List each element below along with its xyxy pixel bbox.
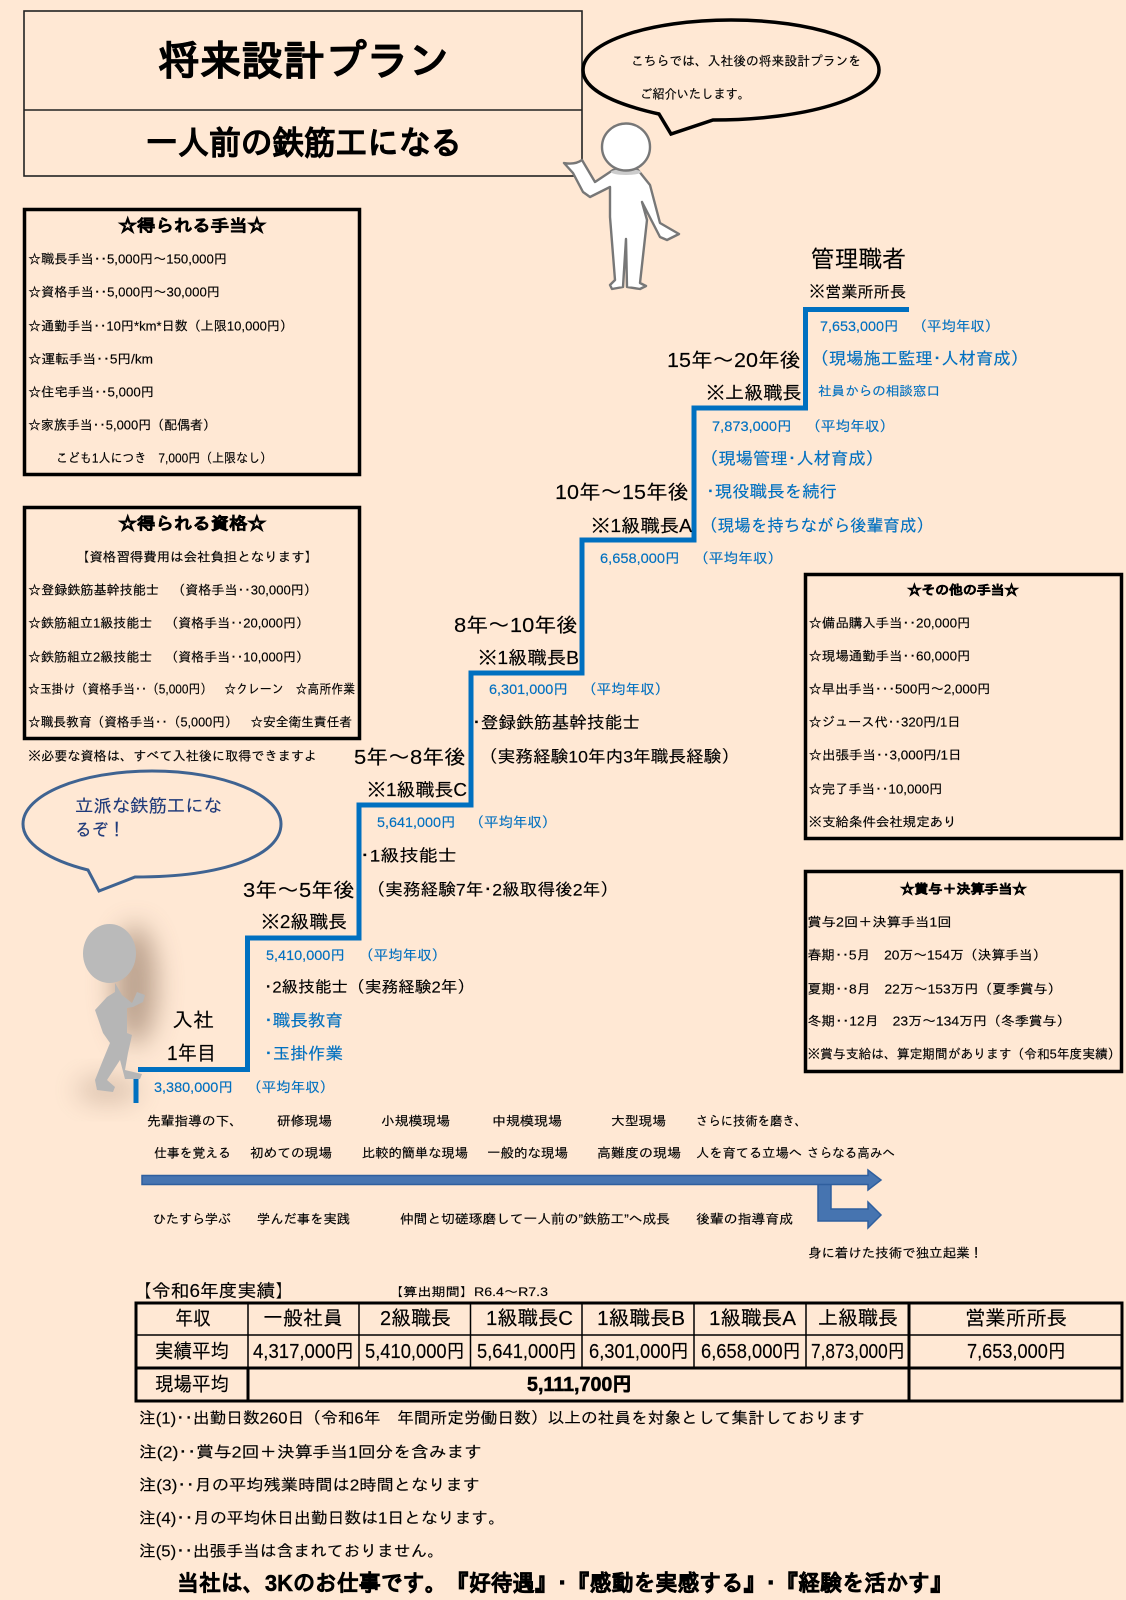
icon: white presenter figure [564,124,679,289]
foreman B salary: 6,301,000円 （平均年収） [489,681,669,697]
manager details: （現場施工監理･人材育成） [812,350,1028,368]
icon: gray climbing figure [76,924,157,1102]
footnotes: 注(4)･･月の平均休日出勤日数は1日となります。 [139,1510,505,1528]
table header row [175,1308,1067,1330]
allowance list: こども1人につき 7,000円（上限なし） [56,450,272,466]
senior foreman details: 7,873,000円 （平均年収） [712,418,894,434]
other allowance list: ☆出張手当･･3,000円/1日 [808,748,962,762]
bonus list: 夏期･･8月 22万～153万円（夏季賞与） [808,982,1062,996]
timeline labels below arrow [153,1212,983,1260]
timeline labels above arrow: 比較的簡単な現場 [362,1146,468,1160]
senior foreman details: ･現役職長を続行 [706,482,837,502]
step: grade 1 foreman A: ※1級職長A [591,516,692,536]
panel: bonus [806,872,1122,1072]
step: grade 1 foreman B: ･登録鉄筋基幹技能士 [472,714,640,732]
step: grade 1 foreman B [454,615,739,766]
step: senior foreman: 15年～20年後 [667,350,801,372]
panel: other allowances [806,574,1122,838]
other allowance list: ※支給条件会社規定あり [808,814,956,830]
grade 2 training [264,1012,343,1064]
closing message: 当社は、3Kのお仕事です。『好待遇』･『感動を実感する』･『経験を活かす』 [177,1570,952,1596]
footnotes: 注(1)･･出勤日数260日（令和6年 年間所定労働日数）以上の社員を対象として集計しております [139,1408,865,1428]
qualification list: ☆鉄筋組立2級技能士 （資格手当･･10,000円） [28,650,309,664]
speech bubble: introduction: こちらでは、入社後の将来設計プランを [631,54,861,68]
step: grade 1 foreman B: 8年～10年後 [454,615,578,637]
qualification list: ☆玉掛け（資格手当･･（5,000円） ☆クレーン ☆高所作業 [28,682,355,696]
allowance list: ☆職長手当･･5,000円～150,000円 [28,252,227,266]
other allowance list: ☆早出手当･･･500円～2,000円 [808,682,990,696]
manager details: 7,653,000円 （平均年収） [820,318,999,334]
table actual average row: 5,641,000円 [477,1341,577,1363]
timeline labels above arrow: 人を育てる立場へ [696,1146,802,1160]
step: grade 2 foreman: 3年～5年後 [243,880,355,902]
step: senior foreman [667,350,933,536]
heading: allowances: ☆得られる手当☆ [117,216,267,236]
timeline labels above arrow: 小規模現場 [381,1114,450,1128]
joining salary: 3,380,000円 （平均年収） [154,1079,334,1095]
timeline labels above arrow: 大型現場 [611,1114,666,1128]
table header row: 営業所所長 [965,1308,1067,1330]
speech bubble: introduction: ご紹介いたします。 [640,86,750,102]
timeline labels above arrow [147,1114,895,1160]
bonus list: ※賞与支給は、算定期間があります（令和5年度実績） [808,1046,1120,1062]
heading: other allowances: ☆その他の手当☆ [906,582,1020,598]
speech bubble: introduction [583,20,879,134]
table heading: 【令和6年度実績】 [133,1281,294,1301]
footnotes: 注(5)･･出張手当は含まれておりません。 [139,1542,444,1560]
step: grade 1 foreman B: （実務経験10年内3年職長経験） [480,748,739,766]
table header row: 上級職長 [818,1308,898,1330]
grade 2 salary: 5,410,000円 （平均年収） [266,947,446,963]
step: manager: ※営業所所長 [809,284,906,302]
other allowance list: ☆ジュース代･･320円/1日 [808,714,960,730]
step: joining: 1年目 [167,1043,216,1065]
manager details: 社員からの相談窓口 [818,384,940,398]
heading: qualifications: ☆得られる資格☆ [117,514,267,534]
timeline labels below arrow: 身に着けた技術で独立起業！ [808,1246,983,1260]
bonus list: 冬期･･12月 23万～134万円（冬季賞与） [808,1014,1070,1028]
qualification list: ☆職長教育（資格手当･･（5,000円） ☆安全衛生責任者 [28,714,352,730]
step: manager [809,246,1028,398]
table actual average row: 6,658,000円 [701,1341,801,1363]
table: annual income [136,1302,1122,1401]
step: senior foreman: ※上級職長 [706,383,802,403]
arrow: career timeline with branch [142,1170,881,1228]
allowance list: ☆家族手当･･5,000円（配偶者） [28,418,216,432]
speech bubble: motivation: るぞ！ [75,820,125,840]
table heading [133,1281,548,1301]
timeline labels above arrow: 高難度の現場 [597,1146,681,1160]
table header row: 1級職長C [486,1308,573,1330]
table header row: 1級職長A [709,1308,797,1330]
grade 2 training: ･職長教育 [264,1012,343,1030]
other allowance list: ☆備品購入手当･･20,000円 [808,616,970,630]
step: grade 2 foreman: ※2級職長 [261,912,347,932]
step: grade 1 foreman C: 5年～8年後 [354,747,466,769]
foreman A salary: 6,658,000円 （平均年収） [600,550,782,566]
timeline labels above arrow: 研修現場 [277,1114,332,1128]
timeline labels below arrow: 後輩の指導育成 [696,1212,793,1226]
panel: qualifications [24,508,360,738]
foreman C salary: 5,641,000円 （平均年収） [377,814,556,830]
allowance list: ☆通勤手当･･10円*km*日数（上限10,000円） [28,318,293,334]
timeline labels above arrow: 中規模現場 [492,1114,562,1128]
table site average row: 現場平均 [155,1374,229,1396]
grade 2 training: ･玉掛作業 [264,1044,343,1064]
step: grade 1 foreman C [354,747,618,900]
step: grade 2 foreman [243,880,474,1064]
table header row: 1級職長B [597,1308,685,1330]
step: grade 1 foreman A [555,482,782,566]
table actual average row: 7,873,000円 [811,1341,905,1363]
footnotes: 注(2)･･賞与2回＋決算手当1回分を含みます [139,1444,482,1462]
manager details [812,318,1028,398]
table header row: 2級職長 [380,1308,451,1330]
step: grade 1 foreman C: （実務経験7年･2級取得後2年） [368,880,618,900]
timeline labels above arrow: 一般的な現場 [487,1146,568,1160]
step: joining: 入社 [172,1010,214,1032]
heading: bonus: ☆賞与＋決算手当☆ [899,882,1028,896]
table site average row [155,1374,632,1396]
panel: allowances [24,210,360,474]
timeline labels below arrow: ひたすら学ぶ [153,1212,231,1226]
main title: 将来設計プラン [158,38,450,84]
step: joining [154,1010,334,1095]
timeline labels above arrow: さらなる高みへ [807,1146,895,1160]
table actual average row: 6,301,000円 [589,1341,689,1363]
table header row: 年収 [175,1308,211,1330]
step: grade 1 foreman B: ※1級職長B [478,648,579,668]
timeline labels below arrow: 学んだ事を実践 [257,1212,350,1226]
footnotes [139,1408,865,1560]
step: grade 1 foreman C: ･1級技能士 [360,846,457,866]
other allowance list: ☆完了手当･･10,000円 [808,782,942,796]
other allowance list [808,616,990,830]
table actual average row [155,1341,1066,1363]
qualification list [28,550,355,730]
table header row: 一般社員 [263,1308,343,1330]
table actual average row: 4,317,000円 [253,1341,354,1363]
bonus list [808,914,1120,1062]
career staircase line [136,310,909,1103]
qualification list: ☆鉄筋組立1級技能士 （資格手当･･20,000円） [28,616,309,630]
step: grade 1 foreman A: 10年～15年後 [555,482,689,504]
note: qualifications: ※必要な資格は、すべて入社後に取得できますよ [28,748,317,764]
table actual average row: 5,410,000円 [365,1341,465,1363]
bonus list: 春期･･5月 20万～154万（決算手当） [808,948,1046,962]
timeline labels above arrow: 先輩指導の下、 [147,1114,243,1128]
step: grade 1 foreman C: ※1級職長C [367,780,467,800]
speech bubble: motivation [23,771,281,891]
allowance list: ☆住宅手当･･5,000円 [28,384,154,400]
senior foreman details [701,418,933,536]
table heading: 【算出期間】R6.4～R7.3 [389,1285,548,1299]
table actual average row: 7,653,000円 [967,1341,1066,1363]
timeline labels above arrow: 仕事を覚える [154,1146,231,1160]
table site average row: 5,111,700円 [527,1374,632,1396]
speech bubble: motivation: 立派な鉄筋工にな [75,796,222,816]
senior foreman details: （現場管理･人材育成） [701,450,883,468]
qualification list: ☆登録鉄筋基幹技能士 （資格手当･･30,000円） [28,582,317,598]
table actual average row: 実績平均 [155,1341,229,1363]
senior foreman details: （現場を持ちながら後輩育成） [701,516,933,536]
qualification list: 【資格習得費用は会社負担となります】 [76,550,318,564]
step: manager: 管理職者 [811,246,906,274]
bonus list: 賞与2回＋決算手当1回 [808,914,952,930]
allowance list: ☆資格手当･･5,000円～30,000円 [28,284,220,300]
step: grade 2 foreman: ･2級技能士（実務経験2年） [264,978,474,996]
timeline labels below arrow: 仲間と切磋琢磨して一人前の”鉄筋工”へ成長 [400,1212,670,1226]
allowance list: ☆運転手当･･5円/km [28,352,153,366]
allowance list [28,252,293,466]
title block [24,11,582,176]
other allowance list: ☆現場通勤手当･･60,000円 [808,648,970,664]
footnotes: 注(3)･･月の平均残業時間は2時間となります [139,1476,480,1494]
timeline labels above arrow: 初めての現場 [250,1146,332,1160]
timeline labels above arrow: さらに技術を磨き、 [696,1114,807,1128]
subtitle: 一人前の鉄筋工になる [146,124,462,162]
